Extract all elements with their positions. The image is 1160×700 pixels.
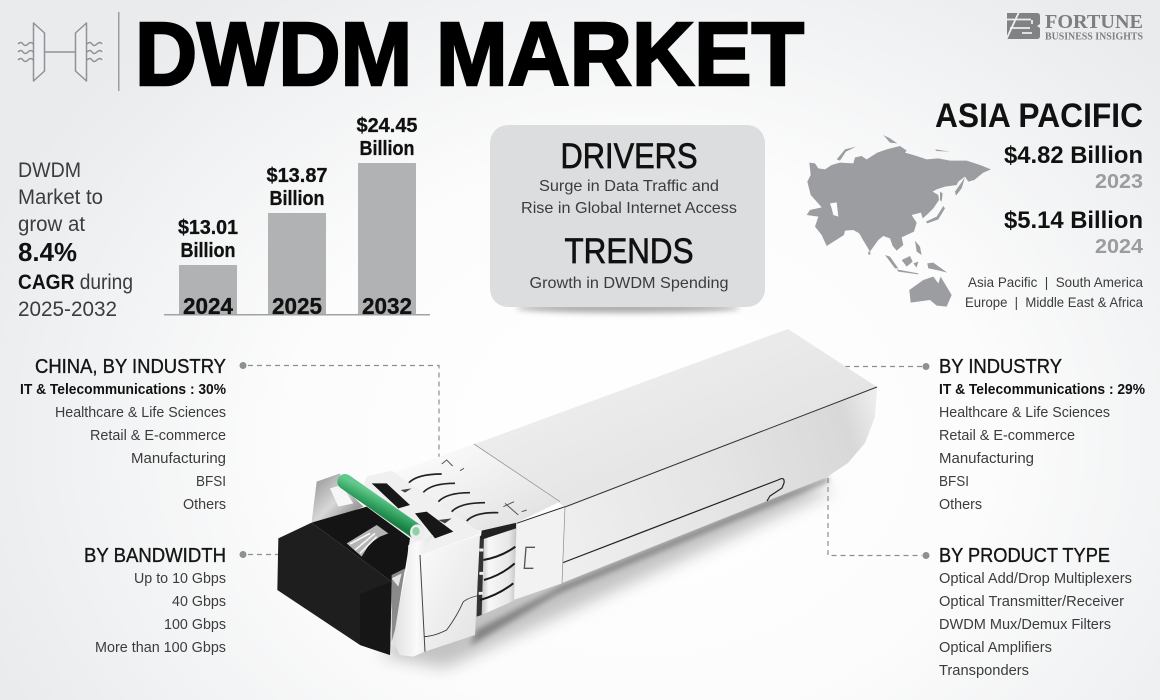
metal cage section right xyxy=(512,507,565,601)
stat: 2024 value: $5.14 Billion xyxy=(1004,207,1143,234)
bar chart: market size: 2025 xyxy=(272,293,322,319)
list: by bandwidth: BY BANDWIDTH xyxy=(84,545,226,567)
text: CAGR statement: grow at xyxy=(18,213,85,236)
chrome slot section xyxy=(477,523,517,617)
bar chart: market size: $13.01 xyxy=(178,217,238,239)
map: Asia Pacific xyxy=(807,135,991,307)
text: CAGR statement: 8.4% xyxy=(18,237,77,267)
bar chart: market size: $13.87 xyxy=(266,165,328,187)
list: by product type: DWDM Mux/Demux Filters xyxy=(939,617,1111,633)
bar chart: market size: 2032 xyxy=(362,293,412,319)
front plate xyxy=(420,535,480,652)
list: by product type: Optical Amplifiers xyxy=(939,640,1052,656)
heading: Asia Pacific: ASIA PACIFIC xyxy=(935,97,1143,135)
list: by industry: Healthcare & Life Sciences xyxy=(939,405,1110,421)
list: by industry: Retail & E-commerce xyxy=(939,428,1075,444)
bar chart: market size: $24.45 xyxy=(356,115,418,137)
logo: Fortune Business Insights: BUSINESS INSIGHTS xyxy=(1045,32,1143,42)
list: by industry: Manufacturing xyxy=(939,451,1034,467)
list: China by industry: Others xyxy=(183,497,226,513)
product: SFP transceiver xyxy=(277,329,877,668)
list: by product type: Transponders xyxy=(939,663,1029,679)
panel: drivers and trends: Growth in DWDM Spending xyxy=(530,275,728,292)
bar chart: market size: 2024 xyxy=(183,293,233,319)
list: by bandwidth xyxy=(84,545,226,656)
text: CAGR statement: Market to xyxy=(18,186,103,209)
title: DWDM MARKET xyxy=(135,5,804,105)
stat: 2024 value xyxy=(1004,207,1144,258)
list: by bandwidth: More than 100 Gbps xyxy=(95,640,226,656)
upper plate xyxy=(360,471,482,555)
list: by bandwidth: 40 Gbps xyxy=(172,594,226,610)
panel: drivers and trends: DRIVERS xyxy=(560,137,698,176)
panel: drivers and trends: Rise in Global Internet Access xyxy=(521,200,737,217)
bar chart: market size: Billion xyxy=(180,240,236,262)
bar chart: market size: Billion xyxy=(360,138,414,160)
list: by bandwidth: Up to 10 Gbps xyxy=(134,571,226,587)
list: by industry: BFSI xyxy=(939,474,969,490)
body: side face xyxy=(562,387,877,583)
metal flap xyxy=(312,473,363,525)
stat: 2023 value xyxy=(1004,142,1143,193)
list: China by industry: Healthcare & Life Sciences xyxy=(55,405,226,421)
text: CAGR statement: CAGR during xyxy=(18,271,133,294)
stat: 2023 value: 2023 xyxy=(1095,171,1143,193)
panel: drivers and trends: TRENDS xyxy=(564,232,694,271)
list: by product type: Optical Add/Drop Multiplexers xyxy=(939,571,1132,587)
list: by industry: Others xyxy=(939,497,982,513)
stat: 2024 value: 2024 xyxy=(1095,236,1144,258)
stat: 2023 value: $4.82 Billion xyxy=(1004,142,1143,169)
list: China by industry: Retail & E-commerce xyxy=(90,428,226,444)
list: by bandwidth: 100 Gbps xyxy=(164,617,226,633)
list: by industry xyxy=(939,356,1145,513)
list: China by industry: BFSI xyxy=(196,474,226,490)
panel: drivers and trends xyxy=(490,125,765,313)
list: China by industry xyxy=(20,356,226,513)
callout lines xyxy=(248,366,922,556)
shadow xyxy=(380,482,835,668)
logo: Fortune Business Insights: FORTUNE xyxy=(1045,11,1143,33)
list: by product type: Optical Transmitter/Receiver xyxy=(939,594,1124,610)
text: regions xyxy=(965,274,1143,310)
logo: Fortune Business Insights xyxy=(1006,11,1143,42)
body: top face xyxy=(475,329,877,507)
black connector xyxy=(277,523,392,655)
list: China by industry: Manufacturing xyxy=(131,451,226,467)
text: CAGR statement: DWDM xyxy=(18,159,81,182)
list: China by industry: CHINA, BY INDUSTRY xyxy=(35,356,226,378)
list: China by industry: IT & Telecommunications : 30% xyxy=(20,381,226,398)
list: by industry: IT & Telecommunications : 29% xyxy=(939,381,1145,398)
text: CAGR statement xyxy=(18,159,133,321)
list: by industry: BY INDUSTRY xyxy=(939,356,1062,378)
list: by product type xyxy=(939,545,1132,679)
bar chart: market size xyxy=(164,115,430,319)
black interior xyxy=(312,507,410,582)
list: by product type: BY PRODUCT TYPE xyxy=(939,545,1110,567)
port windows xyxy=(372,483,453,538)
text: CAGR statement: 2025-2032 xyxy=(18,298,117,321)
panel: drivers and trends: Surge in Data Traffic and xyxy=(539,178,719,195)
grill panel xyxy=(393,444,560,531)
icon: DWDM multiplexer xyxy=(18,23,102,81)
side strip xyxy=(392,535,433,657)
bar chart: market size: Billion xyxy=(270,188,324,210)
text: regions: Europe | Middle East & Africa xyxy=(965,294,1143,310)
green pull tab xyxy=(345,482,417,532)
text: regions: Asia Pacific | South America xyxy=(968,274,1143,290)
